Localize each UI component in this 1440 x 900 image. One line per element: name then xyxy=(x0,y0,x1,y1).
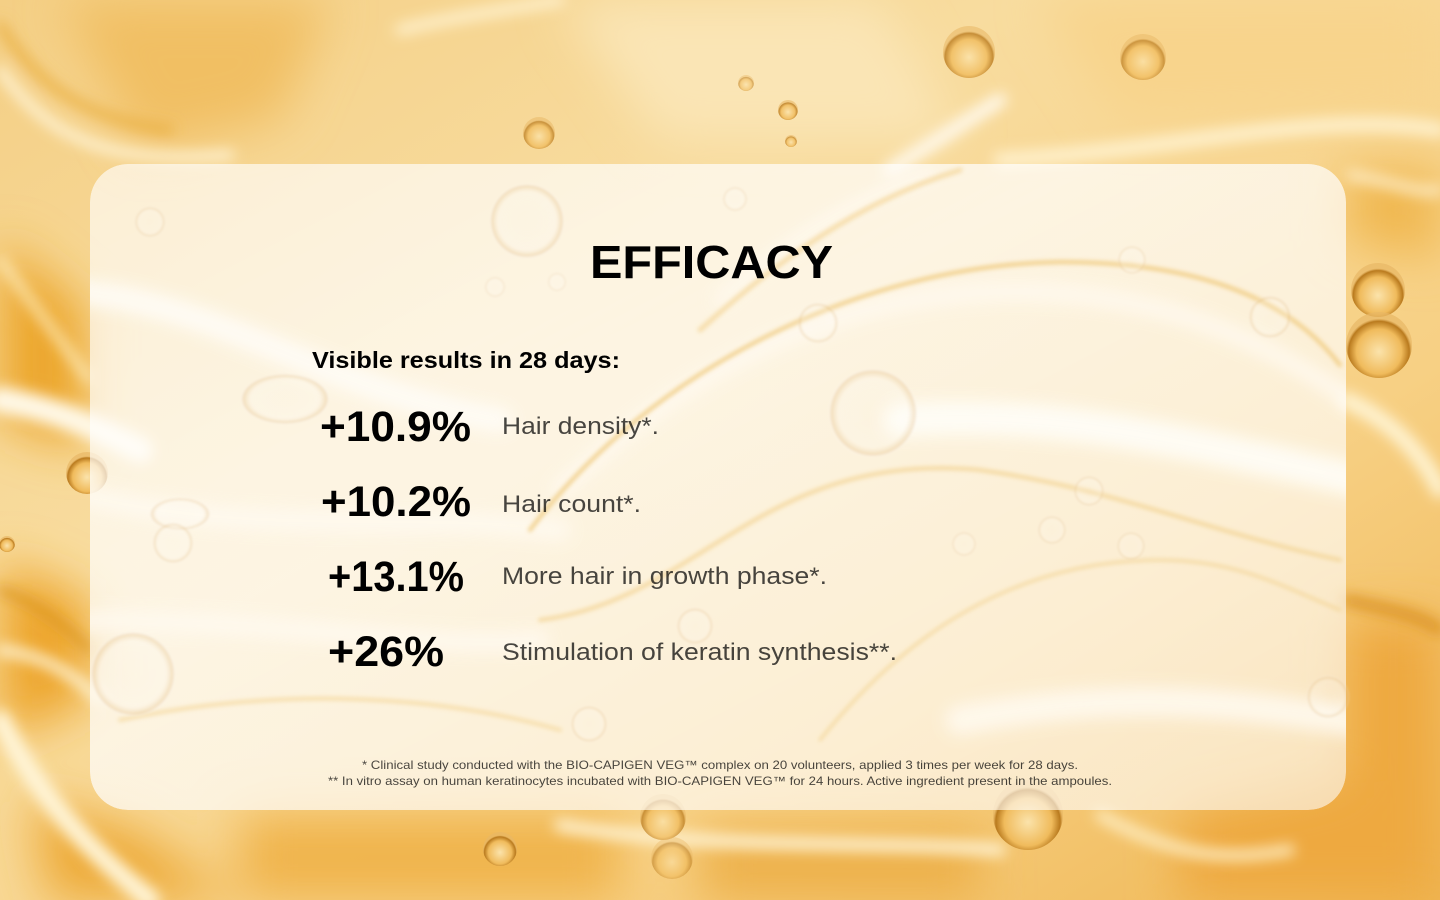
stat: hair count xyxy=(321,478,641,526)
stat: growth phase: More hair in growth phase*. xyxy=(502,563,827,590)
stat: hair density xyxy=(320,403,659,451)
stat: hair count: Hair count*. xyxy=(502,491,641,518)
stat: keratin synthesis: Stimulation of keratin synthesis**. xyxy=(502,639,897,666)
title: EFFICACY xyxy=(590,236,833,288)
footnotes: * Clinical study conducted with the BIO-CAPIGEN VEG™ complex on 20 volunteers, applied 3 times per week for 28 days. xyxy=(362,758,1078,772)
panel: translucent card xyxy=(60,164,1400,810)
stat: growth phase: +13.1% xyxy=(328,553,464,601)
subheading: Visible results in 28 days: xyxy=(312,347,620,373)
footnotes: ** In vitro assay on human keratinocytes incubated with BIO-CAPIGEN VEG™ for 24 hours. Active ingredient present in the ampoules. xyxy=(328,774,1112,788)
stat: keratin synthesis: +26% xyxy=(328,628,444,676)
stat: hair density: +10.9% xyxy=(320,403,471,451)
stat: keratin synthesis xyxy=(328,628,897,676)
stat: growth phase xyxy=(328,553,827,601)
stat: hair count: +10.2% xyxy=(321,478,471,526)
stat: hair density: Hair density*. xyxy=(502,413,659,440)
footnotes xyxy=(328,758,1112,788)
bubbles inside panel xyxy=(91,184,1349,742)
